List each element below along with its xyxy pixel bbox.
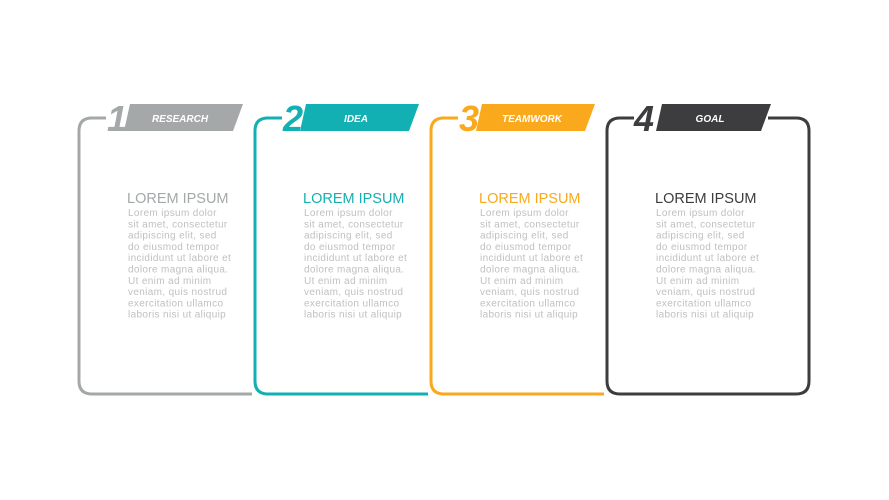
text block 2	[303, 191, 407, 321]
text block 4: Lorem ipsum dolor	[656, 208, 745, 219]
text block 3: laboris nisi ut aliquip	[480, 310, 578, 321]
tab: 1 research: RESEARCH	[152, 114, 209, 125]
tab: 4 goal	[633, 98, 771, 139]
tab: 3 teamwork	[459, 98, 595, 139]
text block 3: exercitation ullamco	[480, 298, 575, 309]
text block 2: exercitation ullamco	[304, 298, 399, 309]
text block 1: Lorem ipsum dolor	[128, 208, 217, 219]
tab: 3 teamwork: TEAMWORK	[502, 114, 563, 125]
text block 2: incididunt ut labore et	[304, 253, 407, 264]
text block 2: LOREM IPSUM	[303, 191, 405, 207]
text block 1: do eiusmod tempor	[128, 242, 220, 253]
text block 4: do eiusmod tempor	[656, 242, 748, 253]
text block 1: Ut enim ad minim	[128, 276, 211, 287]
text block 4: dolore magna aliqua.	[656, 264, 756, 276]
text block 2: dolore magna aliqua.	[304, 264, 404, 276]
text block 4: exercitation ullamco	[656, 298, 751, 309]
text block 4: laboris nisi ut aliquip	[656, 310, 754, 321]
panel outline 3	[431, 118, 604, 394]
text block 3: adipiscing elit, sed	[480, 231, 569, 242]
panel outline 1	[79, 118, 252, 394]
panel outline 4	[607, 118, 809, 394]
tab: 2 idea	[282, 98, 419, 139]
text block 3: veniam, quis nostrud	[480, 287, 579, 298]
text block 3: do eiusmod tempor	[480, 242, 572, 253]
panel outline 2	[255, 118, 428, 394]
tab: 1 research	[107, 98, 243, 139]
tab: 2 idea: 2	[282, 98, 303, 139]
panel: idea	[255, 98, 428, 394]
text block 1: dolore magna aliqua.	[128, 264, 228, 276]
text block 3: incididunt ut labore et	[480, 253, 583, 264]
tab: 4 goal: 4	[633, 98, 654, 139]
text block 3: LOREM IPSUM	[479, 191, 581, 207]
text block 2: do eiusmod tempor	[304, 242, 396, 253]
text block 4: veniam, quis nostrud	[656, 287, 755, 298]
text block 4	[655, 191, 759, 321]
panel: teamwork	[431, 98, 604, 394]
text block 3	[479, 191, 583, 321]
tab: 3 teamwork: 3	[459, 98, 479, 139]
tab: 4 goal: GOAL	[696, 114, 724, 125]
text block 4: Ut enim ad minim	[656, 276, 739, 287]
text block 2: veniam, quis nostrud	[304, 287, 403, 298]
panel: research	[79, 98, 252, 394]
text block 1: veniam, quis nostrud	[128, 287, 227, 298]
text block 2: laboris nisi ut aliquip	[304, 310, 402, 321]
text block 2: Lorem ipsum dolor	[304, 208, 393, 219]
text block 1: adipiscing elit, sed	[128, 231, 217, 242]
text block 2: adipiscing elit, sed	[304, 231, 393, 242]
text block 3: sit amet, consectetur	[480, 219, 580, 230]
text block 1: incididunt ut labore et	[128, 253, 231, 264]
text block 3: Ut enim ad minim	[480, 276, 563, 287]
text block 1	[127, 191, 231, 321]
text block 1: LOREM IPSUM	[127, 191, 229, 207]
text block 4: sit amet, consectetur	[656, 219, 756, 230]
text block 1: laboris nisi ut aliquip	[128, 310, 226, 321]
text block 1: sit amet, consectetur	[128, 219, 228, 230]
text block 2: Ut enim ad minim	[304, 276, 387, 287]
text block 4: adipiscing elit, sed	[656, 231, 745, 242]
text block 4: LOREM IPSUM	[655, 191, 757, 207]
panel: goal	[607, 98, 809, 394]
text block 1: exercitation ullamco	[128, 298, 223, 309]
text block 2: sit amet, consectetur	[304, 219, 404, 230]
text block 3: dolore magna aliqua.	[480, 264, 580, 276]
text block 3: Lorem ipsum dolor	[480, 208, 569, 219]
text block 4: incididunt ut labore et	[656, 253, 759, 264]
tab: 2 idea: IDEA	[344, 114, 368, 125]
tab: 1 research: 1	[107, 98, 127, 139]
